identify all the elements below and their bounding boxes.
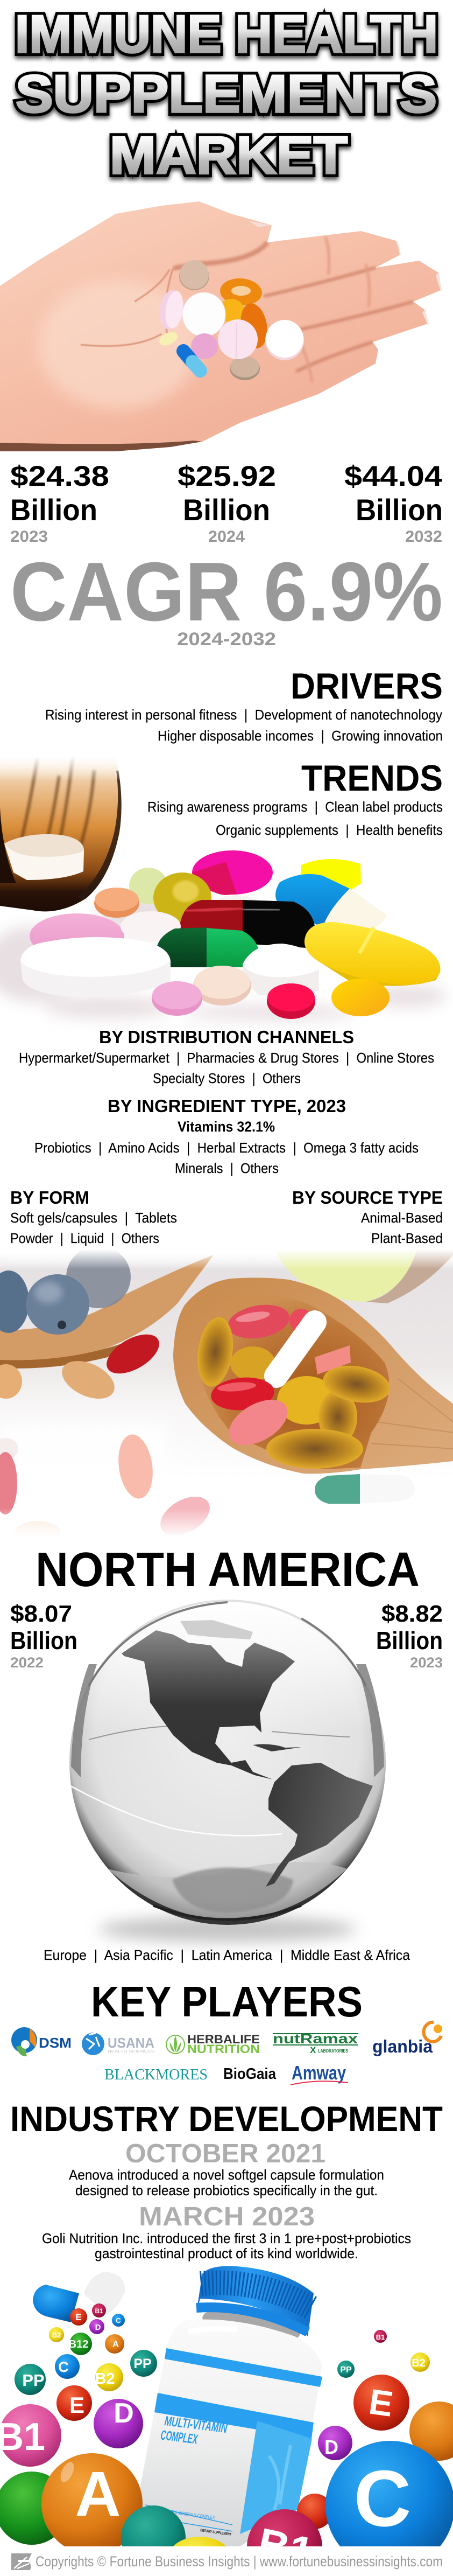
logo: Herbalife Nutrition: NUTRITION: [187, 2042, 260, 2056]
balls right: [247, 2330, 453, 2546]
stat: North America 2022: $8.07: [10, 1601, 72, 1627]
development: March 2023: MARCH 2023: [139, 2202, 315, 2231]
footer logo: [11, 2553, 32, 2570]
balls right: E: [366, 2382, 395, 2424]
tablet: pink small: [152, 981, 202, 1016]
background pills: [129, 868, 168, 904]
capsule: red and black: [179, 900, 315, 948]
title: SUPPLEMENTS: [16, 64, 437, 123]
balls left: D: [114, 2398, 134, 2429]
continent: South America: [266, 1763, 373, 1887]
stat: 2032: 2032: [405, 528, 442, 546]
title: [15, 4, 438, 185]
balls left: A: [75, 2459, 121, 2530]
by distribution channels: [19, 1027, 434, 1086]
by form: BY FORM: [10, 1188, 89, 1207]
spoon: left: [0, 1255, 214, 1369]
balls left: B1: [95, 2307, 103, 2315]
soft background shadows: [0, 894, 447, 1020]
open capsule: [33, 2272, 125, 2322]
pill: white disc: [182, 292, 225, 337]
by ingredient type: [34, 1096, 419, 1176]
by source type: Animal-Based: [361, 1210, 443, 1226]
bottle body: DIETARY SUPPLEMENT: [200, 2529, 232, 2537]
logo: glanbia: glanbia: [372, 2036, 433, 2056]
bottle label text: MULTI-VITAMIN: [164, 2413, 228, 2436]
logo: Herbalife Nutrition: [166, 2033, 260, 2056]
balls right: PP: [340, 2365, 352, 2375]
by form: [10, 1188, 177, 1246]
title: MARKET: [110, 125, 348, 185]
stat: 2023: 2023: [10, 528, 48, 546]
tablet: white right: [243, 944, 319, 995]
apple: [274, 1249, 453, 1303]
trends: TRENDS: [301, 758, 443, 799]
pill: speckled disc: [179, 260, 209, 290]
stat: 2032: Billion: [356, 493, 443, 527]
by form: Soft gels/capsules | Tablets: [10, 1210, 177, 1226]
rim reflections: [89, 1602, 366, 1686]
balls left: E: [75, 2312, 82, 2322]
CAGR: 2024-2032: [177, 629, 276, 650]
balls right: C: [354, 2454, 411, 2543]
softgels: orange: [218, 277, 271, 351]
spoon: main: [173, 1277, 453, 1474]
tablet: large white: [20, 937, 171, 997]
stat: North America 2022: 2022: [10, 1654, 44, 1671]
by ingredient type: Vitamins 32.1%: [178, 1119, 275, 1135]
pill: pink disc: [191, 333, 218, 359]
by distribution channels: BY DISTRIBUTION CHANNELS: [99, 1027, 354, 1047]
balls left: D: [95, 2323, 101, 2332]
logo: DSM: [11, 2027, 72, 2056]
stat: 2024: $25.92: [178, 460, 276, 492]
image: wooden spoon with capsules: [0, 1246, 453, 1545]
heading: key players: KEY PLAYERS: [91, 1978, 363, 2026]
pill: pink tablet side: [157, 288, 186, 331]
title: SUPPLEMENTS: [16, 64, 437, 123]
balls left: B12: [69, 2338, 88, 2350]
capsule: blue: [183, 351, 200, 371]
stat: 2024: Billion: [183, 493, 270, 527]
trends: [147, 758, 443, 838]
balls left: PP: [22, 2371, 45, 2390]
capsule: green: [156, 927, 260, 967]
development: October 2021: OCTOBER 2021: [125, 2139, 325, 2168]
stat: 2023: [10, 460, 109, 546]
by source type: [292, 1188, 443, 1246]
bottle body: [129, 2320, 322, 2546]
stat: North America 2023: [376, 1601, 443, 1671]
stat: North America 2022: Billion: [10, 1626, 77, 1654]
development: October 2021: designed to release probiotics specifically in the gut.: [75, 2182, 378, 2198]
balls left: A: [112, 2339, 119, 2349]
bottle label text: [161, 2416, 228, 2444]
image: multi-vitamin bottle and balls: [0, 2266, 453, 2576]
bottle neck: [202, 2312, 300, 2338]
drivers: DRIVERS: [291, 666, 443, 707]
development: October 2021: [69, 2139, 384, 2198]
stat: North America 2023: 2023: [410, 1654, 443, 1671]
pills: outside: [0, 1327, 216, 1545]
stat: North America 2023: Billion: [376, 1626, 443, 1654]
capsule: green and white: [315, 1474, 360, 1504]
balls right: B1: [253, 2519, 317, 2576]
development: March 2023: gastrointestinal product of its kind worldwide.: [95, 2245, 358, 2261]
balls right: B2: [412, 2357, 426, 2369]
logo: Nutramax: nutRamax: [273, 2032, 358, 2047]
pill: white tablet: [265, 320, 304, 360]
logo: Amway: Amway: [292, 2062, 346, 2084]
tablet: large yellow: [305, 922, 440, 986]
amber bottle: [0, 756, 125, 916]
balls left: C: [58, 2359, 69, 2375]
balls left: E: [69, 2392, 84, 2418]
by ingredient type: Probiotics | Amino Acids | Herbal Extracts | Omega 3 fatty acids: [34, 1140, 419, 1156]
logo: USANA: HEALTH SCIENCES: [108, 2050, 154, 2054]
by ingredient type: BY INGREDIENT TYPE, 2023: [108, 1096, 346, 1116]
tablet: pink: [30, 913, 124, 959]
image: glass globe: [69, 1600, 386, 1942]
tablet: peach: [193, 966, 251, 1006]
by distribution channels: Specialty Stores | Others: [153, 1070, 301, 1086]
development: March 2023: Goli Nutrition Inc. introduced the first 3 in 1 pre+post+probiotics: [42, 2230, 411, 2246]
logo: Nutramax: X: [310, 2045, 316, 2055]
logo: USANA: [82, 2033, 154, 2055]
capsule: blue and white: [275, 874, 387, 932]
logo: glanbia: [372, 2022, 442, 2056]
stat: 2024: [178, 460, 276, 546]
development: March 2023: [42, 2202, 411, 2261]
logo: Nutramax: LABORATORIES: [318, 2048, 348, 2054]
logo: DSM: DSM: [39, 2035, 72, 2051]
drivers: [45, 666, 443, 744]
bottle body: VITAMINS & MINERALS COMPLEX: [157, 2507, 215, 2521]
logo: Blackmores: BLACKMORES: [104, 2067, 208, 2083]
balls left: [0, 2303, 226, 2546]
pill: scored tablet: [218, 319, 258, 359]
continent: North America: [122, 1630, 295, 1779]
bottle cap: [196, 2266, 314, 2336]
stat: North America 2022: [10, 1601, 77, 1671]
tablet: yellow: [331, 979, 390, 1016]
logo: Nutramax: [273, 2032, 358, 2055]
logo: USANA: USANA: [108, 2035, 154, 2051]
balls left: C: [116, 2316, 121, 2324]
stat: 2023: Billion: [10, 493, 97, 527]
stat: 2032: $44.04: [344, 460, 443, 492]
stat: 2024: 2024: [208, 528, 245, 546]
by form: Powder | Liquid | Others: [10, 1230, 159, 1246]
heading: North America: NORTH AMERICA: [36, 1543, 420, 1597]
logo: Herbalife Nutrition: HERBALIFE: [187, 2033, 260, 2046]
image: hand holding pills: [0, 201, 441, 451]
balls right: B1: [376, 2333, 385, 2341]
blueberries: [0, 1246, 131, 1335]
stat: 2023: $24.38: [10, 460, 109, 492]
title: IMMUNE HEALTH: [15, 4, 438, 64]
image: pills with amber bottle: [0, 756, 447, 1020]
capsules in spoon: [193, 1300, 393, 1469]
tablet: red: [267, 983, 315, 1019]
development: October 2021: Aenova introduced a novel softgel capsule formulation: [69, 2167, 384, 2183]
bottle label text: COMPLEX: [160, 2427, 199, 2447]
balls left: B2: [52, 2331, 61, 2339]
stat: North America 2023: $8.82: [381, 1601, 443, 1627]
balls left: PP: [133, 2356, 152, 2371]
pill: cream oval: [157, 329, 180, 348]
by ingredient type: Minerals | Others: [175, 1160, 279, 1176]
balls right: D: [324, 2436, 338, 2458]
logo: BioGaia: BioGaia: [223, 2065, 277, 2083]
by source type: Plant-Based: [371, 1230, 443, 1246]
other regions: Europe | Asia Pacific | Latin America | Middle East & Africa: [44, 1947, 410, 1963]
title: IMMUNE HEALTH: [15, 4, 438, 64]
by source type: BY SOURCE TYPE: [292, 1188, 443, 1207]
title: MARKET: [110, 125, 348, 185]
balls left: B2: [95, 2370, 115, 2387]
pill: brown disc: [230, 356, 260, 380]
stat: 2032: [344, 460, 443, 546]
